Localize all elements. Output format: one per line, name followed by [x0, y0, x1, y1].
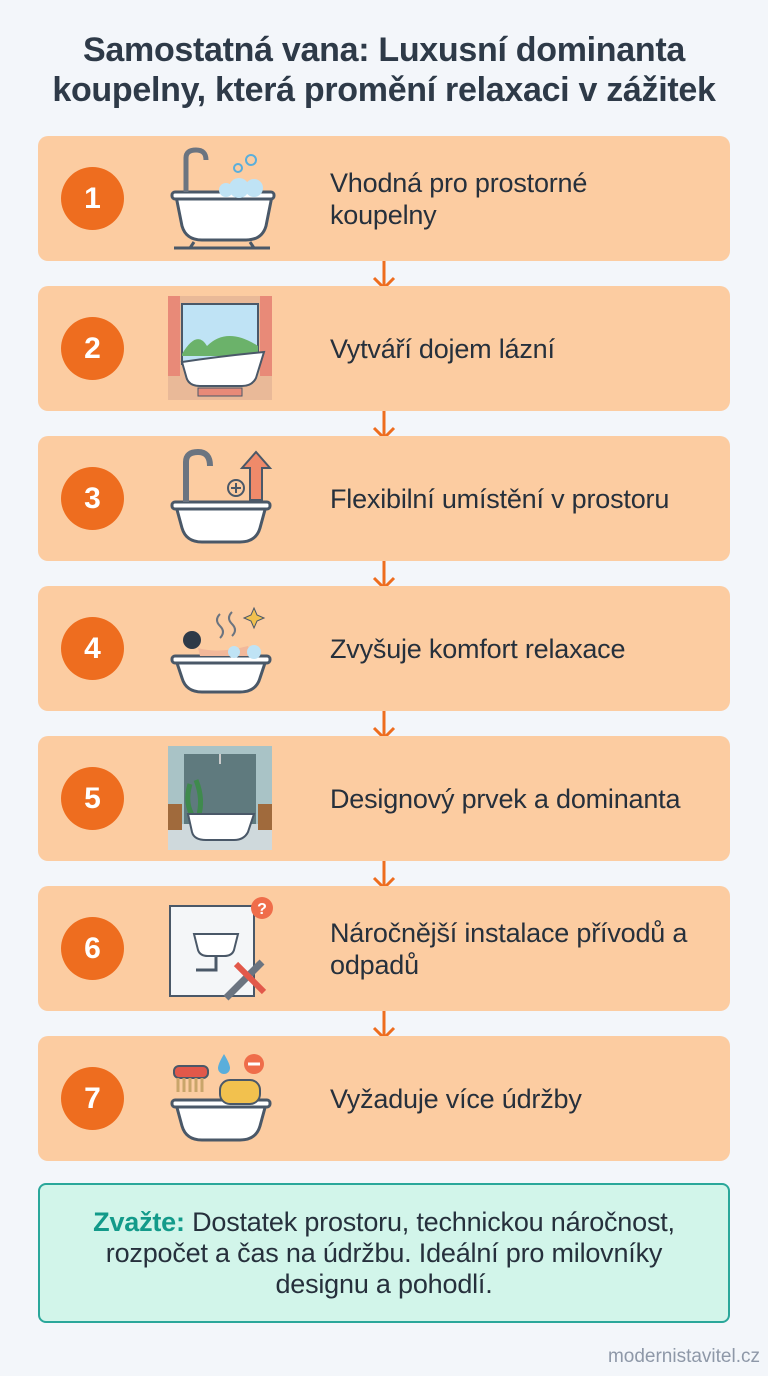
card 1: 1	[84, 182, 101, 215]
card 3	[38, 436, 730, 561]
title: koupelny, která promění relaxaci v zážitek	[52, 71, 716, 109]
arrow	[373, 861, 395, 886]
card 1	[38, 136, 730, 261]
title: Samostatná vana: Luxusní dominanta	[83, 31, 685, 69]
icon: bath by window	[168, 296, 272, 400]
card 2: Vytváří dojem lázní	[330, 334, 555, 364]
card 7: 7	[84, 1082, 101, 1115]
card 5	[38, 736, 730, 861]
card 6: odpadů	[330, 950, 419, 980]
card 4: Zvyšuje komfort relaxace	[330, 634, 625, 664]
card 2: 2	[84, 332, 101, 365]
card 3: Flexibilní umístění v prostoru	[330, 484, 669, 514]
card 2	[38, 286, 730, 411]
arrow	[373, 261, 395, 286]
card 7: Vyžaduje více údržby	[330, 1084, 582, 1114]
callout: note	[38, 1183, 730, 1323]
card 1: Vhodná pro prostorné	[330, 168, 587, 198]
card 3: 3	[84, 482, 101, 515]
callout: note: Zvažte: Dostatek prostoru, technickou náročnost,	[93, 1207, 675, 1237]
icon: blueprint with wrench	[169, 897, 273, 1000]
card 5: 5	[84, 782, 101, 815]
icon: person relaxing in bath	[170, 606, 272, 694]
card 6	[38, 886, 730, 1011]
card 1: koupelny	[330, 200, 436, 230]
source: modernistavitel.cz	[608, 1346, 760, 1367]
title	[52, 31, 716, 109]
arrow	[373, 1011, 395, 1036]
icon: bathtub with bubbles	[170, 148, 276, 250]
icon: blueprint with wrench: ?	[257, 901, 267, 918]
icon: designer bathroom	[168, 746, 272, 850]
icon: bath with brush and sponge	[170, 1054, 272, 1142]
card 6: Náročnější instalace přívodů a	[330, 918, 687, 948]
card 6: 6	[84, 932, 101, 965]
callout: note: designu a pohodlí.	[275, 1269, 493, 1299]
card 5: Designový prvek a dominanta	[330, 784, 680, 814]
arrow	[373, 711, 395, 736]
card 4: 4	[84, 632, 101, 665]
card 7	[38, 1036, 730, 1161]
icon: bath with faucet and arrow	[170, 449, 272, 544]
arrow	[373, 411, 395, 436]
card 4	[38, 586, 730, 711]
callout: note: rozpočet a čas na údržbu. Ideální pro milovníky	[106, 1238, 662, 1268]
arrow	[373, 561, 395, 586]
